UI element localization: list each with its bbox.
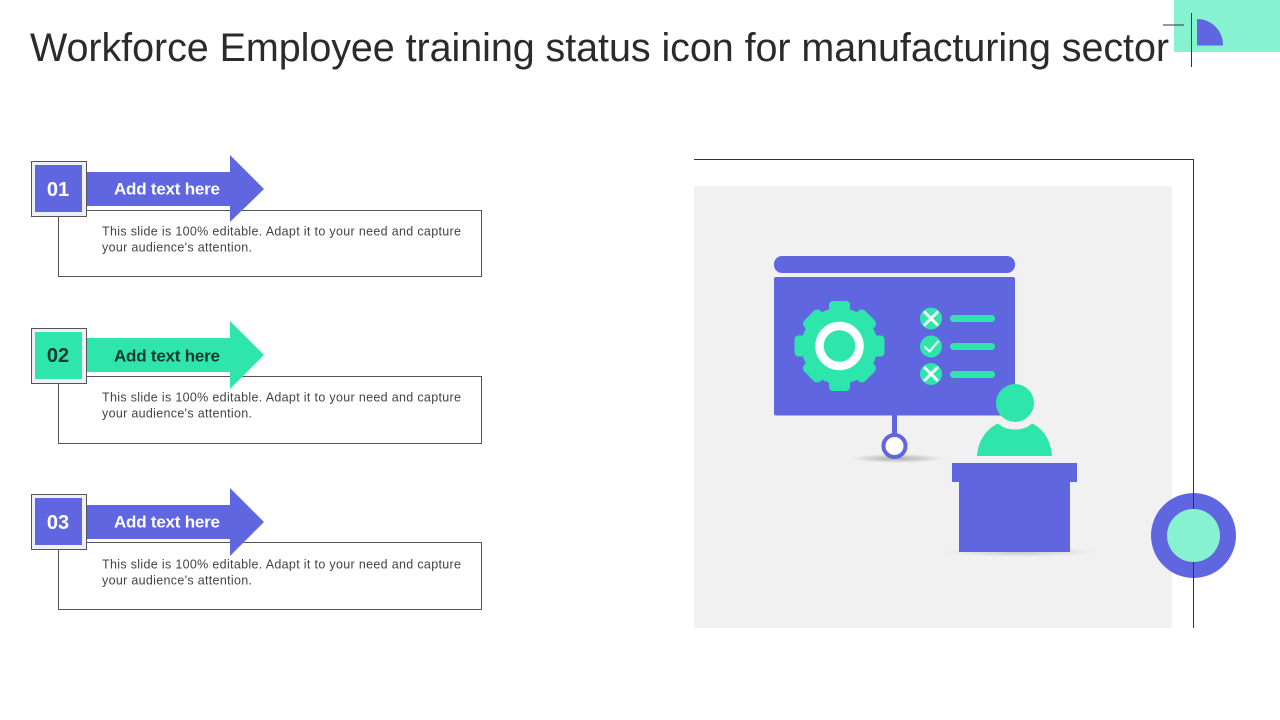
- number badge 03: 03: [47, 512, 69, 534]
- text box 03: [58, 542, 482, 610]
- text box 01: your audience's attention.: [102, 240, 252, 254]
- status item: check: [920, 336, 995, 358]
- icon: presentation board: [774, 256, 1015, 463]
- arrow 02: Add text here: [114, 346, 220, 366]
- arrow 01: Add text here: [114, 180, 220, 198]
- frame lines: [694, 160, 1194, 628]
- item 01: [32, 155, 482, 276]
- item 02: [32, 321, 482, 444]
- title: Workforce Employee training status icon for manufacturing sector: [30, 26, 1169, 70]
- number badge 01: [32, 162, 86, 216]
- podium shadow: [944, 547, 1096, 557]
- status item: cross: [920, 308, 995, 330]
- icon: presenter at podium: [944, 384, 1096, 557]
- number badge 02: 02: [47, 345, 69, 367]
- decorative ring centre: [1167, 509, 1220, 562]
- status item: cross: [920, 363, 995, 385]
- icon: gear: [794, 301, 884, 391]
- item 03: [32, 488, 482, 610]
- arrow 03: Add text here: [114, 512, 220, 532]
- text box 03: This slide is 100% editable. Adapt it to your need and capture: [102, 558, 461, 572]
- decorative ring outer: [1151, 493, 1236, 578]
- text box 02: This slide is 100% editable. Adapt it to your need and capture: [102, 390, 461, 404]
- corner decoration: [1163, 0, 1280, 67]
- illustration panel background: [694, 186, 1172, 628]
- board top bar: [774, 256, 1015, 273]
- arrow 03: [87, 488, 264, 556]
- text box 03: your audience's attention.: [102, 574, 252, 588]
- text box 02: [58, 376, 482, 444]
- arrow 02: [87, 321, 264, 389]
- number badge 01: 01: [47, 179, 69, 201]
- status list: [920, 308, 995, 385]
- number badge 02: [32, 328, 86, 384]
- number badge 03: [32, 494, 86, 550]
- podium: [952, 463, 1077, 552]
- text box 01: This slide is 100% editable. Adapt it to your need and capture: [102, 224, 461, 238]
- board stand: [850, 414, 944, 463]
- board screen: [774, 277, 1015, 416]
- text box 02: your audience's attention.: [102, 406, 252, 420]
- presenter: [977, 384, 1052, 456]
- arrow 01: [87, 155, 264, 222]
- text box 01: [58, 210, 482, 276]
